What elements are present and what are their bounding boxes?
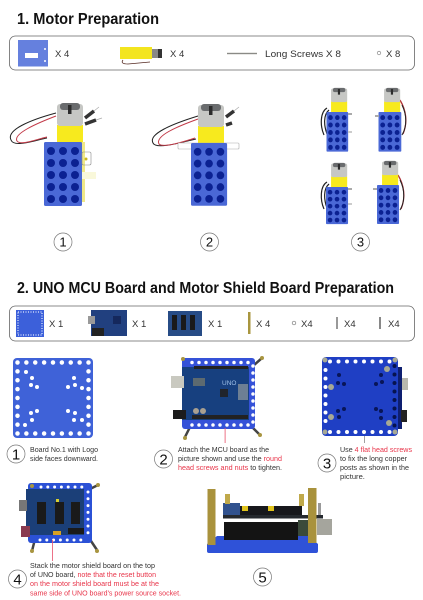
step 5 image: side view of assembled stack bbox=[207, 488, 332, 553]
step 1 image: base board bbox=[13, 358, 93, 438]
step 1 number bbox=[54, 233, 72, 251]
label: UNO quantity: X 1 bbox=[132, 319, 146, 330]
step 3 text: posts as shown in the bbox=[340, 463, 409, 472]
label: long screws quantity: Long Screws X 8 bbox=[265, 49, 341, 60]
step 3 text: Use 4 flat head screws bbox=[340, 445, 412, 454]
label: flat head screw quantity: X4 bbox=[388, 319, 400, 330]
step 1 text: Board No.1 with Logo bbox=[30, 445, 98, 454]
label: round head screw quantity: X4 bbox=[344, 319, 356, 330]
step 2 number: 2 bbox=[159, 452, 168, 468]
label: nut quantity: X4 bbox=[301, 319, 313, 330]
step 4 image: motor shield stacked bbox=[19, 483, 100, 553]
icon: nut bbox=[292, 321, 296, 325]
motor bottom right bbox=[373, 161, 404, 224]
step 5 number: 5 bbox=[258, 570, 267, 586]
step 3 text bbox=[340, 445, 412, 481]
step 3 number bbox=[318, 454, 336, 472]
step 3 text: to fix the long copper bbox=[340, 454, 407, 463]
icon: motor bracket bbox=[18, 40, 48, 66]
icon: copper post bbox=[248, 312, 250, 334]
label: motor quantity: X 4 bbox=[170, 49, 184, 60]
motor bottom left bbox=[321, 163, 352, 224]
step 2 image: MCU board on base bbox=[171, 356, 264, 440]
step 1 number bbox=[7, 445, 25, 464]
step 4 number: 4 bbox=[13, 572, 22, 588]
panel: board parts list bbox=[10, 306, 414, 341]
title: motor preparation: 1. Motor Preparation bbox=[17, 11, 159, 28]
step 2 number bbox=[154, 450, 172, 468]
icon: round head screw bbox=[336, 317, 338, 329]
icon: base board bbox=[16, 310, 44, 337]
step 2 number: 2 bbox=[206, 234, 213, 250]
label: copper post quantity: X 4 bbox=[256, 319, 270, 330]
label: shield quantity: X 1 bbox=[208, 319, 222, 330]
step 1 number: 1 bbox=[12, 446, 20, 464]
step 3 text: picture. bbox=[340, 472, 365, 481]
icon: long screw bbox=[227, 53, 257, 54]
step 4 text: Stack the motor shield board on the top bbox=[30, 561, 155, 570]
motor top left bbox=[321, 88, 352, 152]
step 2 text bbox=[178, 445, 282, 472]
step 2 leader line bbox=[224, 428, 226, 443]
step 4 text bbox=[30, 561, 181, 598]
label: bracket quantity: X 4 bbox=[55, 49, 69, 60]
step 3 leader line bbox=[363, 436, 366, 443]
label: base board quantity: X 1 bbox=[49, 319, 63, 330]
step 3 four motor assemblies bbox=[321, 88, 406, 224]
step 4 text: of UNO board, note that the reset button bbox=[30, 570, 156, 579]
step 3 number: 3 bbox=[357, 234, 364, 250]
label: nut quantity: X 8 bbox=[386, 49, 400, 60]
icon: flat head screw bbox=[379, 317, 381, 329]
step 4 text: on the motor shield board must be at the bbox=[30, 579, 159, 588]
step 1 text: side faces downward. bbox=[30, 454, 98, 463]
motor top right bbox=[375, 88, 406, 152]
step 1 text bbox=[30, 445, 98, 463]
step 5 number bbox=[254, 568, 272, 586]
step 3 number: 3 bbox=[323, 456, 331, 472]
step 2 text: picture shown and use the round bbox=[178, 454, 282, 463]
icon: UNO board bbox=[88, 310, 127, 336]
step 3 number bbox=[352, 233, 370, 251]
step 2 image: MCU board on base: UNO bbox=[222, 380, 236, 387]
step 3 image: board underside with screws bbox=[322, 357, 408, 436]
step 2 number bbox=[200, 233, 218, 251]
step 4 number bbox=[8, 570, 26, 588]
step 4 leader line bbox=[51, 540, 54, 561]
icon: gear motor bbox=[120, 47, 162, 64]
panel: motor parts list bbox=[10, 36, 414, 70]
step 1 motor assembly bbox=[10, 103, 102, 206]
step 2 motor assembly bbox=[152, 104, 239, 206]
icon: nut bbox=[377, 51, 381, 55]
icon: motor shield bbox=[168, 311, 202, 336]
step 2 text: Attach the MCU board as the bbox=[178, 445, 269, 454]
step 2 text: head screws and nuts to tighten. bbox=[178, 463, 282, 472]
step 4 text: same side of UNO board's power source socket. bbox=[30, 588, 181, 598]
step 1 number: 1 bbox=[59, 234, 67, 250]
